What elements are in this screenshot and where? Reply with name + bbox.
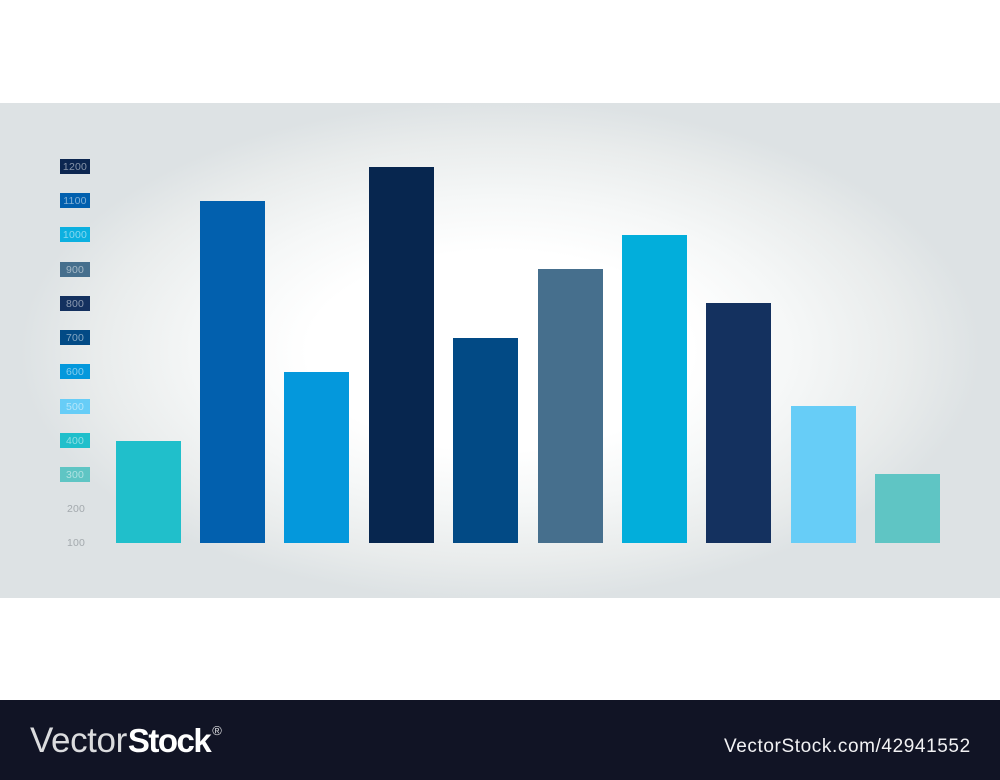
bar: 1100 [200, 201, 265, 543]
tag: 300: 300 [66, 469, 84, 481]
tag: 1100: 1100 [63, 195, 87, 207]
tag: 500: 500 [66, 401, 84, 413]
bar: 300 [875, 474, 940, 543]
bar: 900 [538, 269, 603, 543]
bar: 700 [453, 338, 518, 543]
tag: 1000 [60, 227, 90, 242]
bar: 500 [790, 406, 856, 543]
tag: 1000: 1000 [63, 229, 87, 241]
bar: 800 [706, 303, 771, 543]
bar: 1000 [622, 235, 687, 543]
image id url: VectorStock.com/42941552 [724, 736, 971, 757]
bar: 1200 [369, 167, 434, 543]
tag: 400 [60, 433, 90, 448]
tag: 800: 800 [66, 298, 84, 310]
tag: 700: 700 [66, 332, 84, 344]
logo: VectorStock: VectorStock [30, 721, 210, 760]
tag: 200: 200 [67, 503, 85, 515]
tag: 600: 600 [66, 366, 84, 378]
tag: 500 [60, 399, 90, 414]
bar: 600 [284, 372, 349, 543]
tag: 300 [60, 467, 90, 482]
watermark footer bar [0, 700, 1000, 780]
tag: 100: 100 [67, 537, 85, 549]
tag: 700 [60, 330, 90, 345]
tag: 1200 [60, 159, 90, 174]
bar: 400 [116, 441, 181, 543]
panel: chart background [0, 103, 1000, 598]
tag: 600 [60, 364, 90, 379]
tag: 900: 900 [66, 264, 84, 276]
tag: 1200: 1200 [63, 161, 87, 173]
tag: 400: 400 [66, 435, 84, 447]
tag: 900 [60, 262, 90, 277]
axis labels [60, 159, 90, 549]
tag: 1100 [60, 193, 90, 208]
watermark footer bar: ® [212, 723, 222, 738]
bar chart [116, 167, 940, 543]
tag: 800 [60, 296, 90, 311]
